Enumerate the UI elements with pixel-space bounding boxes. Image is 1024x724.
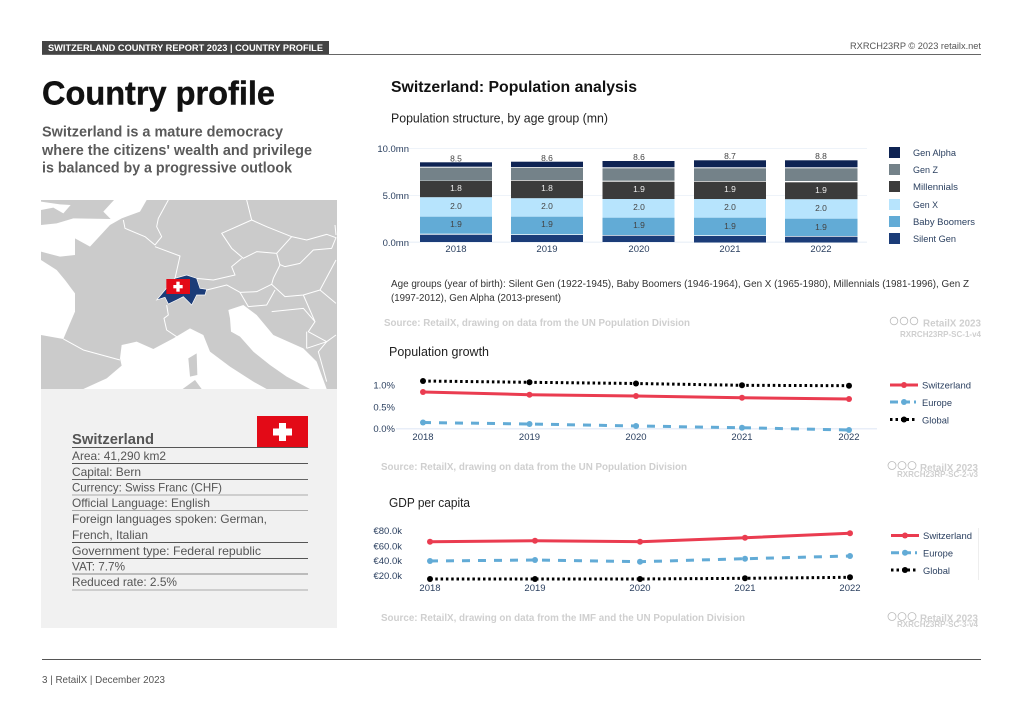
bar 2018: 2.0	[450, 201, 462, 211]
bar 2020: 2020	[628, 244, 650, 255]
line chart: GDP per capita: €20.0k	[373, 571, 402, 582]
bar 2019: 2019	[536, 244, 558, 255]
legend: GDP per capita: Europe	[923, 548, 953, 560]
age group note: Age groups (year of birth): Silent Gen (1922-1945), Baby Boomers (1946-1964), Gen X (1965-1980), Millennials (1981-1996), Gen Z	[391, 279, 969, 290]
series: Switzerland	[427, 530, 853, 545]
bar 2022: 1.9	[815, 185, 827, 195]
header bar: SWITZERLAND COUNTRY REPORT 2023 | COUNTRY PROFILE	[48, 43, 323, 54]
bar 2020: 1.9	[633, 220, 645, 230]
flag marker	[166, 279, 190, 294]
line chart: GDP per capita: €40.0k	[373, 556, 402, 567]
bar 2022: 2.0	[815, 203, 827, 213]
bar 2022: 1.9	[815, 222, 827, 232]
source note: chart 3: Source: RetailX, drawing on data from the IMF and the UN Population Division	[381, 613, 745, 624]
intro text: is balanced by a progressive outlook	[42, 161, 293, 177]
bar 2018: 1.8	[450, 183, 462, 193]
bar 2019: 8.6	[541, 153, 553, 163]
source note: chart 2	[381, 462, 978, 479]
line chart: population growth: 0.0%	[373, 424, 396, 435]
facts list: Government type: Federal republic	[72, 544, 261, 558]
bar 2019: 1.9	[541, 219, 553, 229]
facts list: Area: 41,290 km2	[72, 449, 166, 463]
source note: chart 1: RXRCH23RP-SC-1-v4	[900, 329, 981, 339]
intro text: Switzerland is a mature democracy	[42, 125, 283, 141]
bar 2019: 1.8	[541, 183, 553, 193]
legend: population growth: Switzerland	[922, 380, 971, 392]
bar 2021: 2.0	[724, 202, 736, 212]
section heading: Switzerland: Population analysis	[391, 79, 637, 96]
legend: population growth	[890, 380, 971, 426]
Switzerland shape	[157, 275, 207, 305]
line chart: GDP per capita: 2020	[629, 583, 651, 594]
facts list: French, Italian	[72, 528, 148, 542]
bar 2018: 1.9	[450, 219, 462, 229]
line chart: GDP per capita: 2022	[839, 583, 861, 594]
series: Europe	[420, 420, 852, 433]
bar 2020: 1.9	[633, 184, 645, 194]
source note: chart 2: RXRCH23RP-SC-2-v3	[897, 469, 978, 479]
bar 2019	[511, 153, 583, 255]
bar 2022: 2022	[810, 244, 832, 255]
bar 2020: 8.6	[633, 152, 645, 162]
footer: 3 | RetailX | December 2023	[42, 675, 165, 686]
series: Global	[420, 378, 852, 389]
age group note: (1997-2012), Gen Alpha (2013-present)	[391, 293, 561, 304]
source note: chart 2: Source: RetailX, drawing on data from the UN Population Division	[381, 462, 687, 473]
line chart: population growth: 2019	[519, 432, 540, 443]
legend: age groups: Millennials	[913, 182, 958, 193]
bar 2020	[602, 152, 674, 255]
bar 2021: 1.9	[724, 221, 736, 231]
chart title: population structure: Population structure, by age group (mn)	[391, 112, 608, 126]
bar 2021: 2021	[719, 244, 741, 255]
source note: chart 1: RetailX 2023	[923, 318, 981, 330]
source note: chart 3	[381, 612, 978, 629]
age group note	[391, 279, 969, 304]
facts list: Currency: Swiss Franc (CHF)	[72, 480, 222, 494]
line chart: GDP per capita: 2018	[419, 583, 441, 594]
source note: chart 2: RetailX 2023	[920, 463, 978, 474]
facts list: Reduced rate: 2.5%	[72, 575, 177, 589]
line chart: population growth: 2018	[412, 432, 434, 443]
series: Switzerland	[420, 389, 852, 402]
intro text	[41, 125, 312, 177]
stacked bar chart: population structure: 10.0mn	[377, 144, 409, 155]
bar 2021: 1.9	[724, 184, 736, 194]
line chart: GDP per capita	[373, 526, 861, 594]
bar 2018	[420, 154, 492, 255]
chart title: GDP per capita: GDP per capita	[389, 496, 470, 510]
source note: chart 3: RetailX 2023	[920, 614, 978, 624]
line chart: population growth: 2020	[625, 432, 647, 443]
source note: chart 1: Source: RetailX, drawing on data from the UN Population Division	[384, 318, 690, 329]
series: Europe	[427, 553, 853, 565]
series: Global	[427, 574, 853, 582]
country name: Switzerland	[72, 432, 154, 448]
legend: population growth: Global	[922, 416, 949, 426]
bar 2021	[694, 151, 766, 255]
facts list: VAT: 7.7%	[72, 560, 125, 574]
bar 2018: 8.5	[450, 154, 462, 164]
source note: chart 3: RXRCH23RP-SC-3-v4	[897, 619, 978, 629]
legend: age groups: Silent Gen	[913, 234, 956, 245]
legend: age groups	[889, 147, 975, 245]
line chart: GDP per capita: 2021	[734, 583, 756, 594]
facts list	[72, 447, 308, 590]
legend: GDP per capita: Switzerland	[923, 531, 972, 542]
legend: population growth: Europe	[922, 398, 952, 409]
line chart: population growth: 2022	[838, 432, 860, 443]
line chart: population growth	[373, 378, 877, 443]
facts list: Official Language: English	[72, 496, 210, 510]
chart title: population growth: Population growth	[389, 345, 489, 359]
bar 2018: 2018	[445, 244, 467, 255]
line chart: GDP per capita: 2019	[524, 583, 546, 594]
legend: age groups: Gen Alpha	[913, 148, 957, 159]
header bar: RXRCH23RP © 2023 retailx.net	[850, 41, 981, 52]
line chart: population growth: 2021	[731, 432, 753, 443]
stacked bar chart: population structure: 0.0mn	[383, 238, 409, 249]
bar 2021: 8.7	[724, 151, 736, 161]
line chart: population growth: 0.5%	[373, 402, 396, 414]
line chart: GDP per capita: €60.0k	[373, 542, 402, 552]
bar 2020: 2.0	[633, 202, 645, 212]
title: Country profile	[42, 74, 275, 112]
bar 2022	[785, 151, 858, 255]
header bar	[42, 41, 981, 55]
stacked bar chart: population structure	[377, 144, 867, 255]
bar 2019: 2.0	[541, 201, 553, 211]
flag of Switzerland	[257, 416, 308, 448]
legend: age groups: Gen Z	[913, 165, 938, 176]
legend: GDP per capita: Global	[923, 566, 950, 577]
panel: country facts	[41, 389, 337, 628]
legend: age groups: Gen X	[913, 200, 939, 211]
source note: chart 1	[384, 317, 981, 339]
line chart: GDP per capita: €80.0k	[373, 526, 402, 537]
facts list: Foreign languages spoken: German,	[72, 512, 267, 526]
stacked bar chart: population structure: 5.0mn	[383, 191, 409, 202]
line chart: population growth: 1.0%	[373, 380, 396, 392]
facts list: Capital: Bern	[72, 465, 141, 479]
intro text: where the citizens' wealth and privilege	[41, 143, 312, 159]
bar 2022: 8.8	[815, 151, 827, 161]
legend: age groups: Baby Boomers	[913, 217, 975, 228]
map of Europe with Switzerland highlighted	[41, 200, 337, 389]
legend: GDP per capita	[891, 528, 979, 580]
